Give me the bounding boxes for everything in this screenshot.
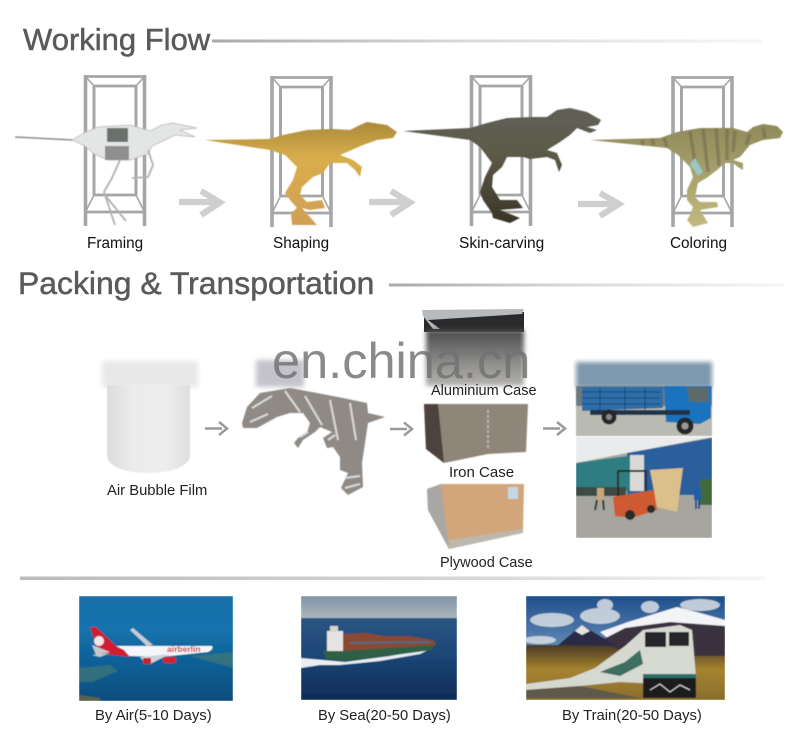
icon: steel frame 3 [470, 75, 532, 226]
label: Shaping: Shaping [273, 235, 329, 252]
arrow: cases to truck [543, 422, 565, 435]
stage: shaping [205, 76, 397, 252]
stage: skin-carving [403, 75, 601, 252]
photo: train [526, 596, 725, 700]
label: Framing: Framing [87, 235, 143, 252]
photo: air bubble film [102, 361, 198, 473]
illustration: yellow dinosaur [205, 122, 397, 225]
panel: working flow stages [15, 75, 783, 252]
label: By Air: By Air(5-10 Days) [95, 708, 212, 724]
label: Air Bubble Film: Air Bubble Film [107, 483, 207, 499]
photo: blue truck [573, 358, 715, 436]
label: Iron Case: Iron Case [449, 464, 514, 481]
heading: Packing & Transportation: Packing & Transportation [18, 265, 374, 301]
photo: aluminium case [422, 309, 524, 386]
label: Aluminium Case: Aluminium Case [431, 383, 537, 399]
arrow: framing to shaping [179, 191, 220, 215]
arrow: dinosaur to cases [390, 422, 412, 436]
title: Working Flow: Working Flow [23, 22, 211, 57]
divider rule: transport [20, 576, 765, 580]
label: Coloring: Coloring [670, 235, 727, 252]
label: By Train: By Train(20-50 Days) [562, 708, 702, 724]
photo: iron case [424, 404, 528, 463]
arrow: film to dinosaur [205, 422, 227, 435]
illustration: carved dinosaur [403, 108, 601, 223]
heading rule: packing [389, 284, 784, 286]
photo: airplane [79, 596, 233, 701]
photo: forklift loading crate [576, 437, 712, 538]
stage: framing [15, 75, 197, 252]
arrow: skin-carving to coloring [578, 193, 619, 216]
watermark: en.china.cn: en.china.cn [272, 332, 530, 389]
photo: airplane: airberlin [167, 644, 201, 654]
photo: container ship [301, 596, 457, 700]
photo: plywood case [427, 484, 524, 549]
panel: packing process [102, 309, 712, 571]
label: Skin-carving: Skin-carving [459, 235, 544, 252]
label: By Sea: By Sea(20-50 Days) [318, 708, 451, 724]
label: Plywood Case: Plywood Case [440, 555, 533, 571]
panel: transport options [79, 596, 725, 724]
photo: foil wrapped dinosaur [242, 360, 385, 495]
icon: steel frame 1 [84, 75, 146, 226]
icon: steel frame 2 [270, 76, 332, 227]
heading rule: working flow [212, 40, 762, 42]
stage: coloring [590, 76, 783, 252]
illustration: dinosaur skeleton [15, 123, 197, 225]
icon: steel frame 4 [672, 76, 734, 227]
arrow: shaping to skin-carving [369, 191, 410, 215]
illustration: painted dinosaur [590, 124, 783, 227]
